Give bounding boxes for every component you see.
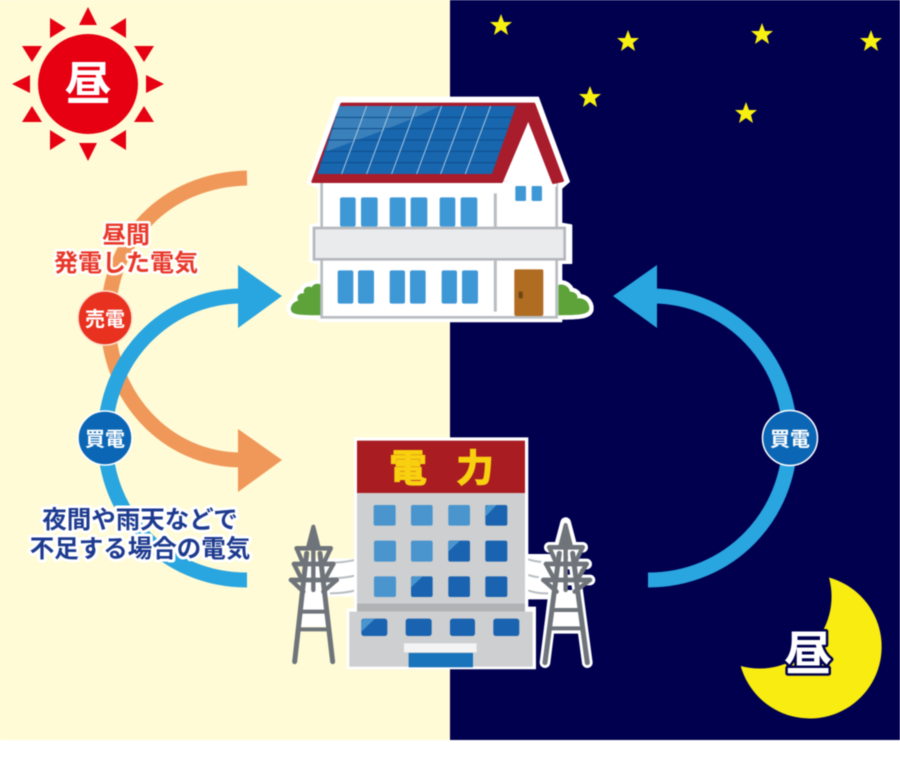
- gable wall: [497, 117, 557, 187]
- door knob: [519, 292, 523, 298]
- icon: sun with 昼: [12, 7, 164, 161]
- arrow: orange selling arc: [108, 178, 282, 492]
- arrow: blue buying arc, left: [105, 265, 282, 580]
- right pylon: [543, 523, 590, 663]
- left pylon: [291, 527, 337, 662]
- red sign: [357, 441, 525, 493]
- building halo: [347, 437, 536, 669]
- badge: buying, left: 買電: [85, 429, 125, 451]
- badge: selling: 売電: [85, 308, 125, 331]
- entrance door: [409, 653, 473, 667]
- podium shadow: [357, 604, 525, 612]
- badge: selling: [78, 291, 132, 345]
- text: shortage electricity: [30, 506, 250, 563]
- wall divider: [491, 193, 500, 312]
- icon: stars: [490, 14, 882, 123]
- text: shortage electricity: 不足する場合の電気: [30, 535, 250, 563]
- icon: crescent moon with label: [741, 578, 882, 719]
- door: [514, 269, 543, 316]
- entrance canopy: [404, 643, 477, 652]
- arrow: blue buying arc, right: [613, 265, 790, 580]
- podium: [349, 612, 533, 667]
- house halo: [307, 97, 572, 322]
- sign text: 電: [389, 447, 427, 489]
- tower windows: [374, 505, 507, 597]
- walls: [322, 180, 557, 317]
- upper windows: [340, 186, 542, 227]
- badge: buying, right: [762, 410, 818, 466]
- moon label: 昼: [784, 628, 832, 681]
- podium windows: [361, 619, 519, 636]
- text: daytime generated electricity: 昼間: [102, 222, 150, 249]
- solar panel: [317, 106, 516, 174]
- text: daytime generated electricity: [54, 222, 198, 277]
- roof: [313, 104, 563, 183]
- sign text: [389, 447, 494, 489]
- sun label: 昼: [64, 57, 112, 110]
- balcony band: [314, 228, 565, 259]
- tower body: [357, 441, 525, 607]
- lower windows: [338, 270, 478, 304]
- badge: buying, right: 買電: [770, 429, 810, 451]
- panel: daytime background: [0, 0, 450, 740]
- transmission wires: [303, 554, 567, 599]
- badge: buying, left: [78, 411, 132, 465]
- bushes: [291, 284, 589, 315]
- text: shortage electricity: 夜間や雨天などで: [42, 506, 238, 534]
- panel: night background: [450, 0, 900, 740]
- sign text: 力: [456, 447, 494, 489]
- text: daytime generated electricity: 発電した電気: [54, 250, 198, 277]
- icon: power company building with pylons: [291, 437, 590, 669]
- icon: house with solar panels: [291, 97, 589, 322]
